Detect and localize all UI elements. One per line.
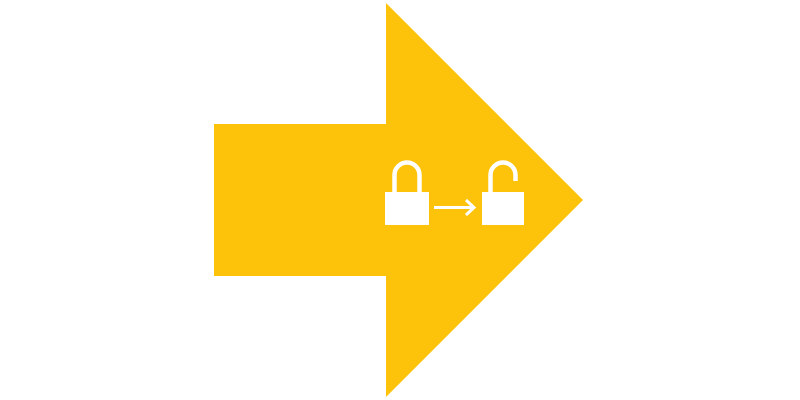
big arrow: [214, 3, 583, 397]
icon: open lock: [482, 162, 524, 225]
icon: closed lock: [385, 163, 429, 225]
icon: arrow between locks: [434, 200, 474, 215]
